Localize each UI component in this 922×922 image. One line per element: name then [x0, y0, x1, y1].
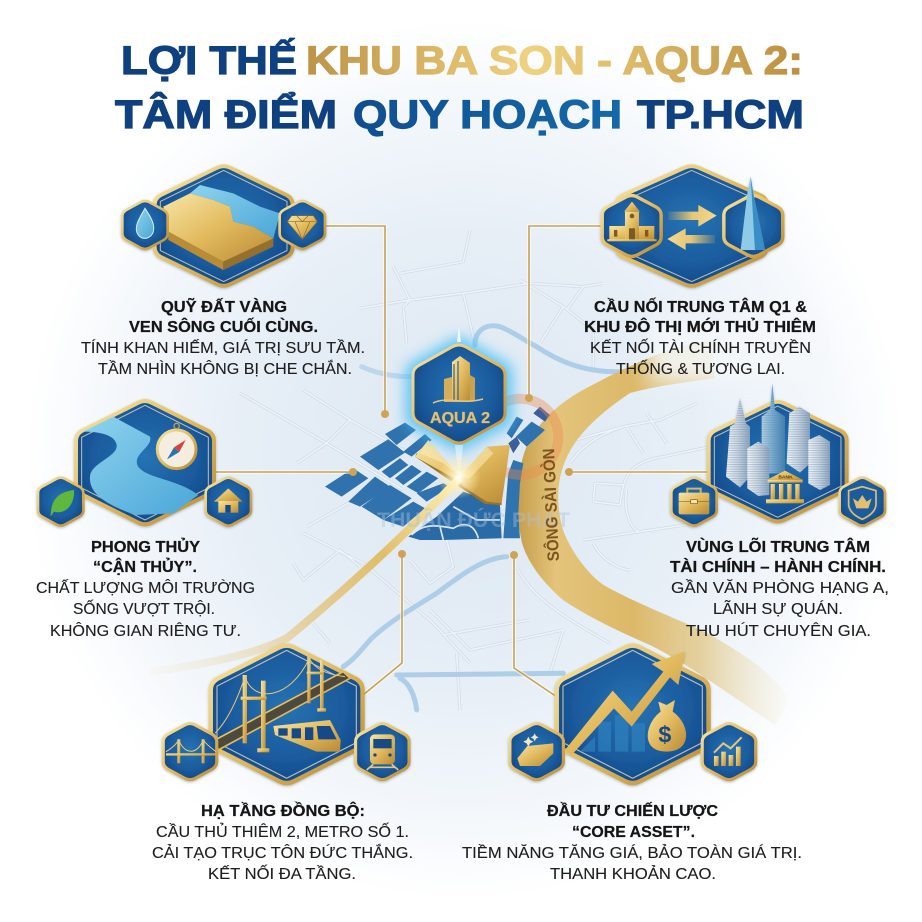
map: Ba Son blocks: [325, 407, 550, 540]
text block: CHẤT LƯỢNG MÔI TRƯỜNG: [36, 578, 255, 597]
text block: CẢI TẠO TRỤC TÔN ĐỨC THẮNG.: [152, 843, 413, 862]
text block: TIỀM NĂNG TĂNG GIÁ, BẢO TOÀN GIÁ TRỊ.: [462, 843, 802, 862]
text block: GẦN VĂN PHÒNG HẠNG A,: [671, 578, 889, 597]
connector lines: [213, 226, 708, 697]
title: LỢI THẾ: [121, 37, 297, 83]
title: TP.HCM: [637, 93, 804, 137]
title: KHU BA SON - AQUA 2:: [306, 39, 803, 83]
text block: PHONG THỦY: [91, 537, 200, 556]
center badge: Aqua 2: [406, 326, 512, 480]
icon group: church, arrows, tower: [602, 166, 783, 286]
icon group: growth arrow and money bag: [510, 646, 756, 783]
icon group: financial towers and bank: [671, 383, 885, 526]
text block: [462, 801, 802, 883]
text block: “CẬN THỦY”.: [93, 557, 197, 576]
text block: VEN SÔNG CUỐI CÙNG.: [129, 316, 318, 336]
text block: [36, 537, 255, 640]
text block: TÍNH KHAN HIẾM, GIÁ TRỊ SƯU TẦM.: [81, 338, 365, 357]
text block: TẦM NHÌN KHÔNG BỊ CHE CHẮN.: [98, 359, 352, 378]
text block: THỐNG & TƯƠNG LAI.: [616, 358, 785, 378]
text block: KẾT NỐI ĐA TẦNG.: [208, 863, 356, 883]
beam from site: [150, 478, 460, 672]
icon group: growth arrow and money bag: $: [658, 722, 671, 748]
text block: LÃNH SỰ QUÁN.: [713, 598, 843, 618]
text block: [81, 296, 365, 378]
watermark: THUẬN ĐỨC PHÁT: [377, 508, 570, 532]
text block: ĐẦU TƯ CHIẾN LƯỢC: [547, 801, 718, 820]
glow behind upper right text: [650, 320, 820, 382]
title: QUY HOẠCH: [353, 93, 622, 137]
title: [115, 37, 804, 137]
text block: THANH KHOẢN CAO.: [550, 864, 716, 883]
panel: Quỹ đất vàng: [81, 166, 365, 378]
text block: KHÔNG GIAN RIÊNG TƯ.: [50, 621, 241, 640]
text block: “CORE ASSET”.: [572, 824, 695, 841]
icon group: river and compass: [38, 401, 251, 526]
river: Sông Sài Gòn gold band: [518, 340, 790, 725]
site sparkle: [437, 455, 481, 499]
center badge: Aqua 2: AQUA 2: [430, 410, 490, 427]
text block: KHU ĐÔ THỊ MỚI THỦ THIÊM: [584, 317, 816, 336]
icon: aqua tower: [433, 356, 483, 403]
text block: [584, 296, 816, 378]
icon group: gold land by river: [122, 166, 325, 286]
panel: Vùng lõi tài chính: [670, 383, 889, 640]
river label: SÔNG SÀI GÒN: [539, 448, 563, 562]
orange translucent ring: [496, 399, 558, 475]
panel: Đầu tư chiến lược: [462, 646, 802, 883]
gold block at Aqua 2 site: [415, 440, 510, 505]
title: TÂM ĐIỂM: [115, 90, 337, 137]
map: light blue side channels: [343, 326, 623, 710]
text block: CẦU THỦ THIÊM 2, METRO SỐ 1.: [156, 821, 409, 841]
panel: Cầu nối Q1 - Thủ Thiêm: [584, 166, 816, 378]
text block: HẠ TẦNG ĐỒNG BỘ:: [201, 801, 365, 820]
icon group: financial towers and bank: BANK: [778, 475, 793, 481]
text block: CẦU NỐI TRUNG TÂM Q1 &: [594, 296, 807, 316]
text block: VÙNG LÕI TRUNG TÂM: [686, 536, 870, 556]
panel: Phong thủy cận thủy: [36, 401, 255, 640]
panel: Hạ tầng đồng bộ: [152, 646, 413, 883]
text block: TÀI CHÍNH – HÀNH CHÍNH.: [670, 557, 886, 576]
text block: SỐNG VƯỢT TRỘI.: [73, 598, 215, 618]
text block: [152, 801, 413, 883]
text block: QUỸ ĐẤT VÀNG: [161, 296, 287, 316]
text block: [670, 536, 889, 640]
text block: THU HÚT CHUYÊN GIA.: [686, 621, 871, 640]
text block: KẾT NỐI TÀI CHÍNH TRUYỀN: [590, 337, 811, 357]
map: street network: [240, 230, 710, 710]
icon group: bridge and metro: [163, 646, 409, 783]
